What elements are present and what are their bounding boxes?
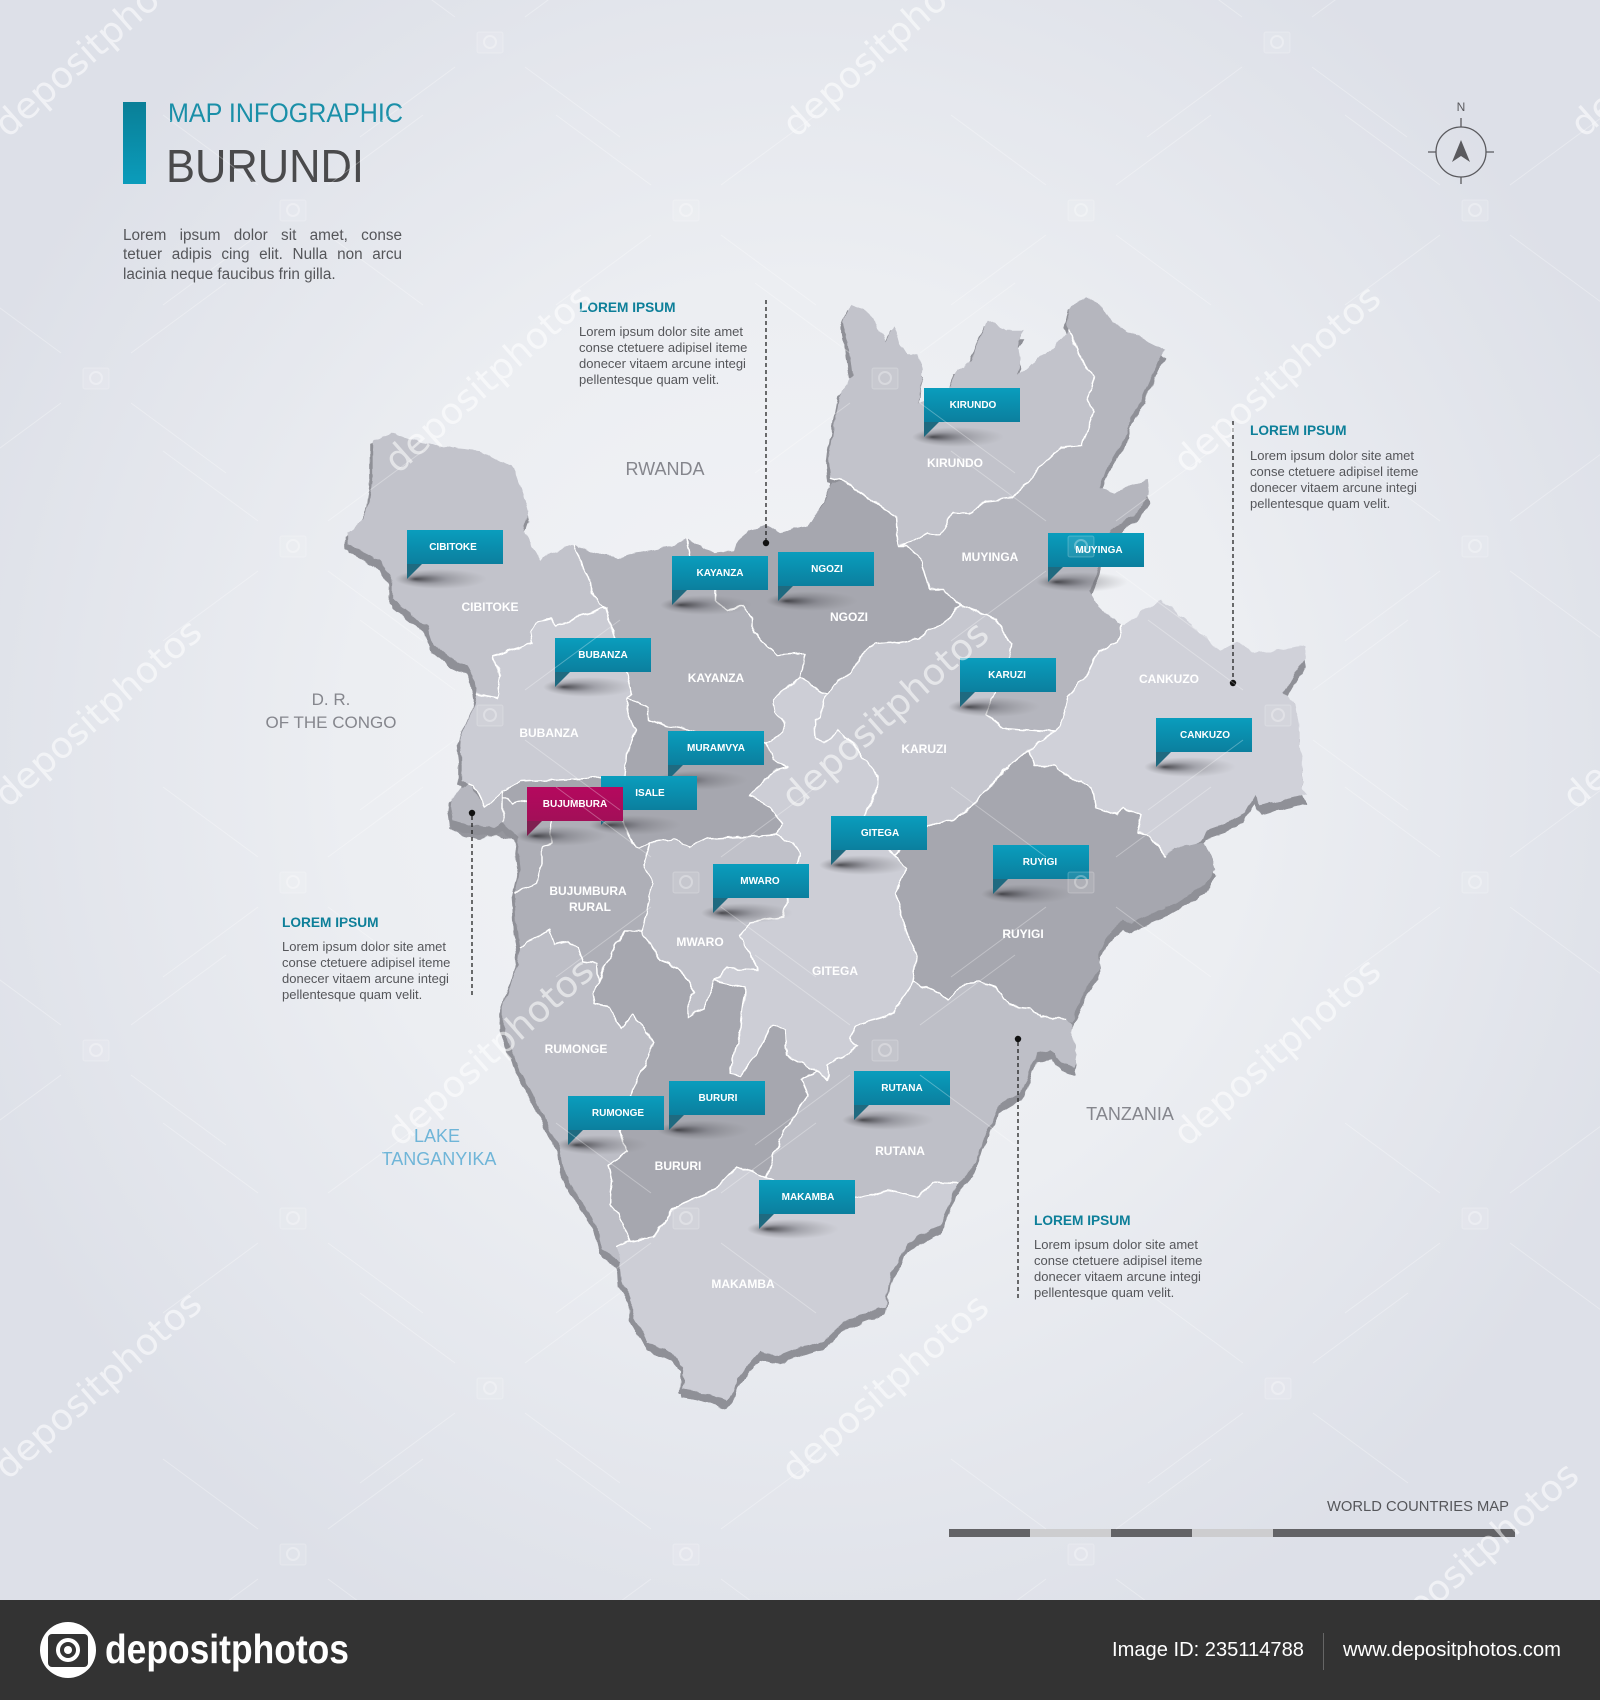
pin: Cankuzo [1144,718,1252,777]
intro paragraph: tetuer adipis cing elit. Nulla non arcu [123,246,402,263]
footer logo icon [40,1622,96,1678]
footer logo wordmark: depositphotos [105,1626,349,1672]
neighbouring country labels [266,459,1174,1169]
region labels: CANKUZO [1139,672,1199,686]
pin: Mwaro [701,864,809,923]
pin: Ruyigi: RUYIGI [1023,857,1057,868]
region labels: GITEGA [812,964,858,978]
region labels: KAYANZA [688,671,745,685]
pin: Ngozi [766,552,874,611]
callout: north: pellentesque quam velit. [579,372,719,387]
callout: east: LOREM IPSUM [1250,423,1347,438]
callout: south: pellentesque quam velit. [1034,1285,1174,1300]
watermark layer: depositphotos [379,950,602,1155]
region: Kayanza [573,539,805,743]
region: Gitega [715,678,917,1080]
region: Bujumbura Rural [515,815,653,982]
pin: Bujumbura: BUJUMBURA [543,799,607,810]
callout: east: donecer vitaem arcune integi [1250,480,1417,495]
map of Burundi [348,298,1307,1400]
region: Bubanza [460,607,635,807]
region labels: BUBANZA [519,726,579,740]
compass: N [1457,100,1465,114]
region labels: MWARO [676,935,724,949]
region: Bururi [593,931,817,1241]
neighbouring country labels: OF THE CONGO [266,713,396,732]
callout: west: pellentesque quam velit. [282,987,422,1002]
pin: Karuzi [948,658,1056,717]
pin: Muyinga: MUYINGA [1075,545,1123,556]
map regions with extruded base [348,298,1307,1400]
pin: Isale: ISALE [635,788,665,799]
pin: Ruyigi [981,845,1089,904]
callout: north: LOREM IPSUM [579,300,676,315]
pin: Cankuzo: CANKUZO [1180,730,1230,741]
title: map infographic: MAP INFOGRAPHIC [168,98,403,128]
pin: Bururi [657,1081,765,1140]
pin: Kirundo [912,388,1020,447]
pin: Muyinga [1036,533,1144,592]
title accent bar [123,102,146,184]
scale bar [949,1529,1515,1537]
footer image id: Image ID: 235114788 [1112,1639,1304,1661]
pin: Makamba: MAKAMBA [782,1192,834,1203]
world countries map caption: WORLD COUNTRIES MAP [1327,1498,1509,1515]
callout: west: donecer vitaem arcune integi [282,971,449,986]
region: Karuzi [815,605,1056,855]
region labels: RUTANA [875,1144,925,1158]
pin: Mwaro: MWARO [740,876,780,887]
callout: south: conse ctetuere adipisel iteme [1034,1253,1202,1268]
callout: east: pellentesque quam velit. [1250,496,1390,511]
region: Ruyigi [893,751,1216,1022]
region fills [348,298,1307,1400]
callout: north: donecer vitaem arcune integi [579,356,746,371]
pin: Ngozi: NGOZI [811,564,843,575]
watermark layer: depositphotos [377,277,600,482]
region labels: KARUZI [901,742,947,756]
pin: Makamba [747,1180,855,1239]
callout: south [1015,1036,1202,1301]
region labels: RUMONGE [545,1042,607,1056]
region labels: BURURI [655,1159,701,1173]
pin: Muramvya: MURAMVYA [687,743,745,754]
pin: Gitega [819,816,927,875]
region labels: BUJUMBURA [549,884,627,898]
region: Muyinga [907,298,1165,732]
watermark layer: depositphotos [774,613,997,818]
callout: west [282,810,475,1002]
pin: Rumonge [556,1096,664,1155]
region: Kirundo [829,305,1094,546]
pin: Rumonge: RUMONGE [592,1108,644,1119]
watermark layer: depositphotos [1166,950,1389,1155]
region: Muramvya [503,698,787,848]
region: Makamba [618,1166,958,1400]
callout: east [1230,421,1418,686]
region: Bujumbura Mairie [503,798,551,892]
Bujumbura coast base band [450,820,522,840]
region: Mwaro [642,835,800,1017]
callout: north [579,300,769,546]
pin: Kayanza: KAYANZA [696,568,744,579]
pin: Bubanza: BUBANZA [578,650,628,661]
intro paragraph: Lorem ipsum dolor sit amet, conse [123,227,402,244]
pin: Cibitoke [395,530,503,589]
region: Rumonge [503,929,653,1261]
pin: Bururi: BURURI [699,1093,738,1104]
callout: north: Lorem ipsum dolor site amet [579,324,743,339]
pin: Gitega: GITEGA [861,828,899,839]
neighbouring country labels: D. R. [312,690,350,709]
region: Cibitoke [348,434,607,698]
pin: Rutana [842,1071,950,1130]
pin: Isale [589,776,697,835]
region labels: KIRUNDO [927,456,983,470]
footer bar [0,1600,1600,1700]
pin: Bubanza [543,638,651,697]
region: Cankuzo [1030,600,1307,857]
pin: Kayanza [660,556,768,615]
callout: south: LOREM IPSUM [1034,1213,1131,1228]
pin: Bujumbura [515,787,623,846]
pin: Kirundo: KIRUNDO [950,400,997,411]
pin: Muramvya [656,731,764,790]
region labels: MUYINGA [962,550,1019,564]
region: Ngozi [687,482,960,693]
callout: west: conse ctetuere adipisel iteme [282,955,450,970]
neighbouring country labels: TANZANIA [1086,1104,1174,1124]
region labels: CIBITOKE [461,600,519,614]
callout: east: conse ctetuere adipisel iteme [1250,464,1418,479]
region labels: RURAL [569,900,611,914]
watermark layer: depositphotos [1166,277,1389,482]
region: Bujumbura small west [451,783,503,827]
callout: south: donecer vitaem arcune integi [1034,1269,1201,1284]
region labels [461,456,1199,1291]
region: Rutana [765,982,1077,1198]
pin: Karuzi: KARUZI [988,670,1026,681]
neighbouring country labels: TANGANYIKA [382,1149,496,1169]
neighbouring country labels: RWANDA [625,459,705,479]
compass [1428,100,1494,184]
intro paragraph: lacinia neque faucibus frin gilla. [123,266,336,283]
region labels: NGOZI [830,610,868,624]
callout: east: Lorem ipsum dolor site amet [1250,448,1414,463]
footer website: www.depositphotos.com [1342,1639,1561,1661]
callout: north: conse ctetuere adipisel iteme [579,340,747,355]
region labels: RUYIGI [1002,927,1044,941]
pin: Rutana: RUTANA [881,1083,923,1094]
title: Burundi: BURUNDI [166,140,364,192]
pin: Cibitoke: CIBITOKE [429,542,477,553]
callout: west: LOREM IPSUM [282,915,379,930]
neighbouring country labels: LAKE [414,1126,460,1146]
watermark layer: depositphotos [774,1286,997,1491]
callout: west: Lorem ipsum dolor site amet [282,939,446,954]
intro paragraph [123,227,402,283]
watermark layer: depositphotos [1364,1454,1587,1659]
callout: south: Lorem ipsum dolor site amet [1034,1237,1198,1252]
region labels: MAKAMBA [711,1277,775,1291]
